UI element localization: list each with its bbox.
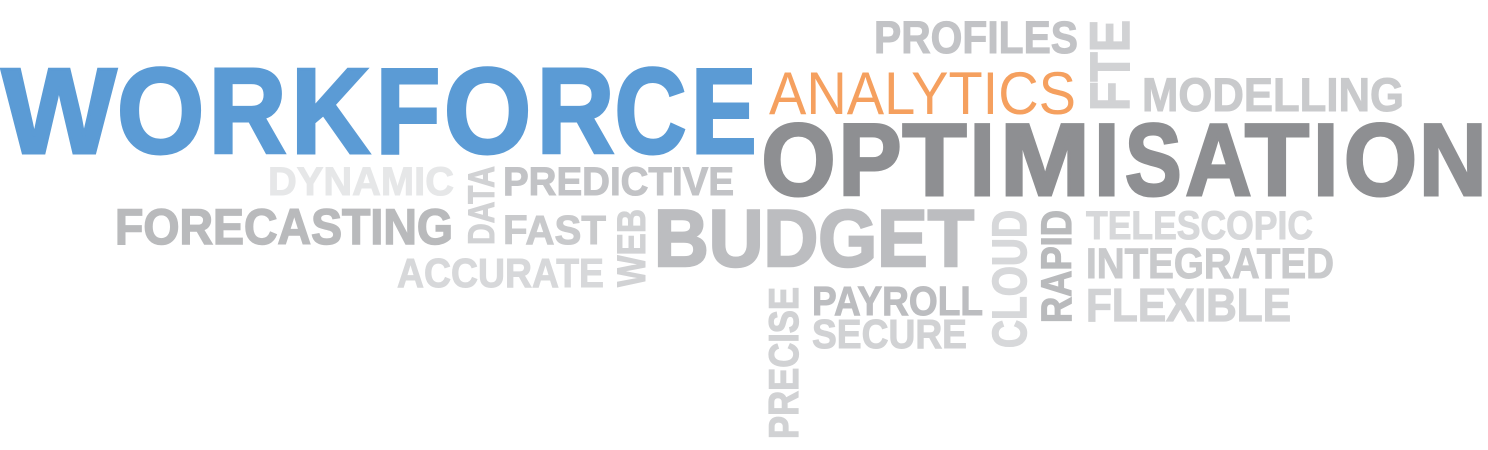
heading word: WORKFORCE: O — [444, 43, 532, 179]
word: SECURE: SECURE — [812, 311, 967, 357]
word: DYNAMIC: DYNAMIC — [268, 160, 454, 204]
heading word: OPTIMISATION: I — [1313, 103, 1338, 217]
heading word: WORKFORCE: C — [614, 43, 686, 179]
word: FLEXIBLE: FLEXIBLE — [1086, 279, 1291, 331]
heading word: OPTIMISATION: P — [838, 103, 902, 217]
heading word: OPTIMISATION: T — [1245, 103, 1309, 217]
heading word: WORKFORCE: F — [376, 43, 440, 179]
word: PRECISE (vertical): PRECISE — [760, 287, 807, 439]
word: MODELLING: MODELLING — [1142, 68, 1404, 121]
word: DATA (vertical): DATA — [461, 166, 502, 245]
word: ANALYTICS: ANALYTICS — [769, 60, 1076, 127]
heading word: OPTIMISATION: T — [902, 103, 966, 217]
word: BUDGET: BUDGET — [654, 194, 974, 284]
heading word: OPTIMISATION: O — [762, 103, 836, 217]
word: RAPID (vertical): RAPID — [1033, 210, 1081, 323]
heading word: OPTIMISATION: A — [1186, 103, 1252, 217]
heading word: WORKFORCE: R — [208, 43, 286, 179]
heading word: WORKFORCE: R — [536, 43, 614, 179]
word: WEB (vertical): WEB — [610, 209, 654, 287]
word: INTEGRATED: INTEGRATED — [1086, 240, 1334, 288]
word: PREDICTIVE: PREDICTIVE — [503, 160, 734, 204]
word: FORECASTING: FORECASTING — [115, 199, 453, 255]
heading word: WORKFORCE: O — [117, 43, 204, 179]
word: FTE (vertical): FTE — [1078, 20, 1141, 111]
heading word: OPTIMISATION: I — [1094, 103, 1119, 217]
heading word: WORKFORCE: W — [2, 43, 117, 179]
word: FAST: FAST — [503, 207, 606, 253]
word: PAYROLL: PAYROLL — [812, 278, 983, 324]
heading word: OPTIMISATION: I — [970, 103, 995, 217]
heading word: OPTIMISATION: O — [1344, 103, 1417, 217]
word: PROFILES: PROFILES — [874, 12, 1078, 63]
heading word: WORKFORCE: K — [291, 43, 370, 179]
heading word: WORKFORCE: E — [691, 43, 757, 179]
word: ACCURATE: ACCURATE — [397, 250, 604, 296]
heading word: OPTIMISATION: M — [1000, 103, 1090, 217]
word: TELESCOPIC: TELESCOPIC — [1086, 204, 1313, 248]
heading word: OPTIMISATION: S — [1125, 103, 1182, 217]
word: CLOUD (vertical): CLOUD — [984, 210, 1037, 348]
